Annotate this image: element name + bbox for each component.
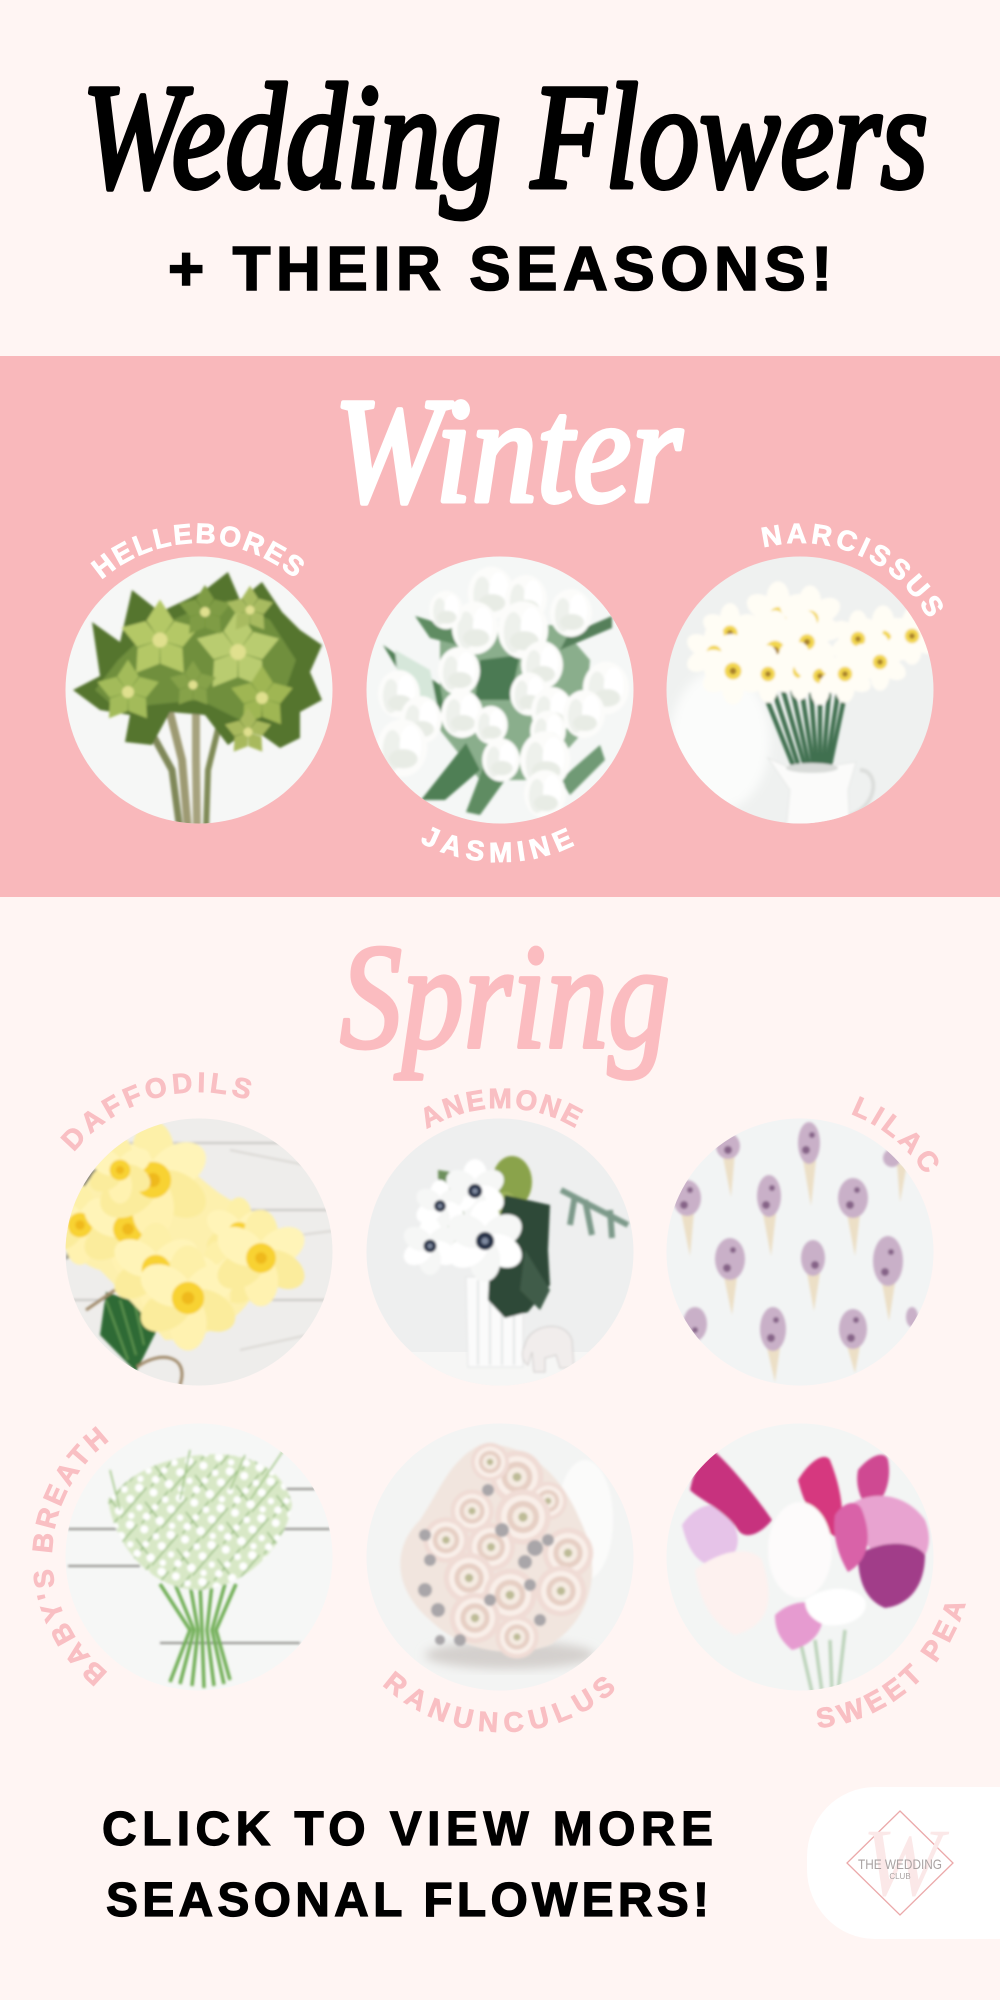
call to action: [102, 1803, 713, 1927]
logo: the wedding club: [807, 1787, 1000, 1939]
label: lilac: LILAC: [852, 1096, 938, 1172]
logo: the wedding club: W: [862, 1809, 950, 1916]
heading: winter: Winter: [334, 368, 683, 534]
logo: the wedding club: CLUB: [889, 1872, 911, 1881]
photo: baby's breath: [60, 1420, 340, 1700]
photo: ranunculus: [360, 1420, 640, 1700]
logo: the wedding club: THE WEDDING: [858, 1856, 942, 1872]
label: baby's breath: BABY'S BREATH: [32, 1426, 109, 1686]
photo: lilac: [660, 1110, 940, 1390]
photo: narcissus: [660, 550, 942, 830]
panel: header: [82, 54, 928, 304]
label: jasmine: JASMINE: [422, 826, 574, 863]
call to action: CLICK TO VIEW MORE: [102, 1803, 713, 1856]
photo: sweet pea: [660, 1420, 940, 1700]
call to action: SEASONAL FLOWERS!: [106, 1874, 709, 1927]
photo: hellebores: [60, 550, 340, 830]
subtitle: + THEIR SEASONS!: [168, 235, 832, 304]
photo: tulips (jasmine): [360, 550, 640, 830]
heading: spring: Spring: [340, 914, 670, 1080]
winter band: [0, 356, 1000, 897]
label: anemone: ANEMONE: [424, 1088, 584, 1129]
photo: daffodils: [66, 1118, 332, 1386]
panel: winter: [0, 356, 1000, 897]
label: daffodils: DAFFODILS: [60, 1072, 252, 1152]
label: ranunculus: RANUNCULUS: [382, 1670, 614, 1732]
photo: anemone: [360, 1110, 640, 1392]
label: hellebores: HELLEBORES: [90, 523, 304, 579]
label: sweet pea: SWEET PEA: [816, 1604, 966, 1728]
panel: spring: [32, 914, 966, 1732]
label: narcissus: NARCISSUS: [761, 523, 943, 616]
